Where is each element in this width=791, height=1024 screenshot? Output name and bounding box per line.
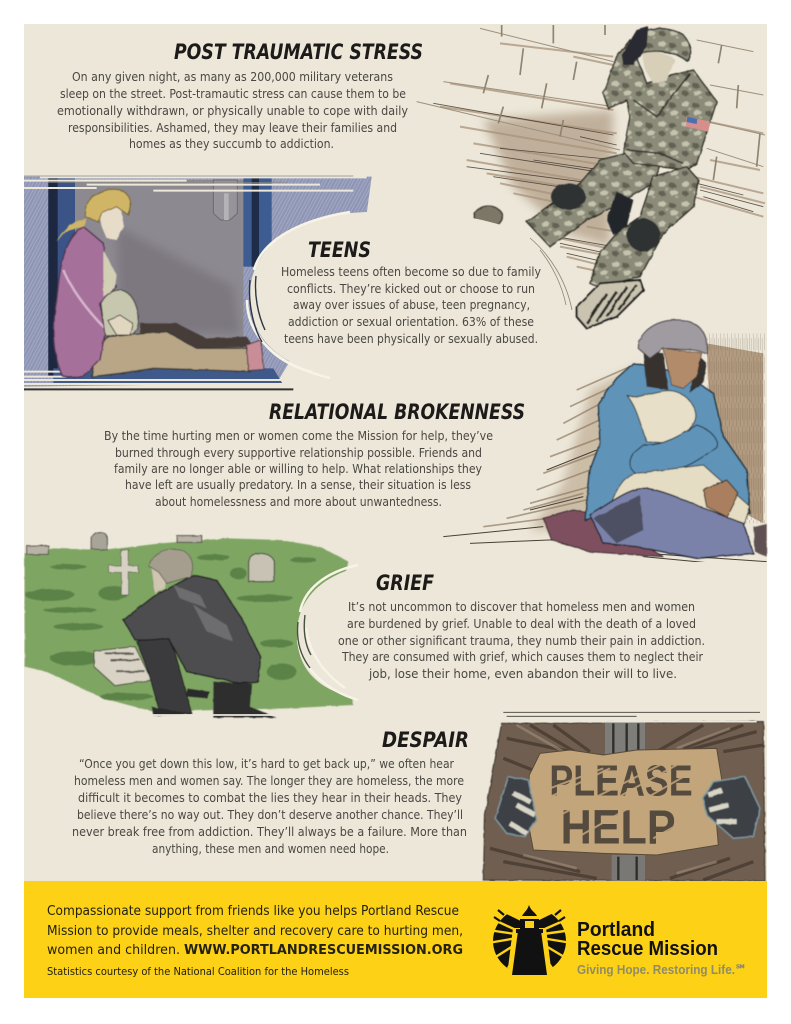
body text: relational brokenness: have left are usually predatory. In a sense, their situation is less — [125, 477, 471, 492]
heading: despair: DESPAIR — [382, 728, 469, 752]
body text: teens: conflicts. They’re kicked out or choose to run — [287, 281, 535, 296]
footer message: Mission to provide meals, shelter and recovery care to hurting men, — [47, 924, 463, 939]
body text: post traumatic stress: responsibilities. Ashamed, they may leave their families and — [68, 120, 397, 135]
body text: despair: “Once you get down this low, it’s hard to get back up,” we often hear — [79, 756, 455, 771]
body text: post traumatic stress: emotionally withdrawn, or physically unable to cope with daily — [57, 103, 408, 118]
please help sign lettering — [549, 757, 693, 854]
body text: relational brokenness: By the time hurting men or women come the Mission for help, they’ve — [104, 428, 493, 443]
icon: lighthouse logo — [488, 905, 572, 976]
body text: post traumatic stress — [57, 69, 408, 151]
section: teens — [281, 238, 541, 346]
body text: despair: never break free from addiction. They’ll always be a failure. More than — [72, 824, 467, 839]
logo wordmark: Rescue Mission — [577, 937, 718, 960]
heading: relational brokenness: RELATIONAL BROKENNESS — [269, 400, 525, 424]
body text: relational brokenness: about homelessness and more about unwantedness. — [155, 494, 442, 509]
heading: teens: TEENS — [308, 238, 371, 262]
heading: post traumatic stress: POST TRAUMATIC STRESS — [174, 40, 423, 64]
body text: grief: are burdened by grief. Unable to deal with the death of a loved — [347, 616, 696, 631]
yellow footer band — [24, 881, 767, 998]
body text: despair: difficult it becomes to combat the lies they hear in their heads. They — [78, 790, 462, 805]
illustration: hands holding a please help sign — [483, 712, 765, 881]
cream background panel — [24, 24, 767, 882]
footer message: WWW.PORTLANDRESCUEMISSION.ORG — [184, 943, 463, 958]
section: despair — [72, 728, 469, 856]
statistics credit: Statistics courtesy of the National Coalition for the Homeless — [47, 966, 349, 978]
text bubble: grief — [297, 562, 767, 700]
footer message — [47, 904, 463, 958]
body text: teens: teens have been physically or sexually abused. — [284, 331, 538, 346]
body text: post traumatic stress: On any given night, as many as 200,000 military veterans — [72, 69, 393, 84]
body text: grief — [338, 599, 705, 681]
woman figure — [54, 189, 264, 377]
footer message: women and children. — [47, 943, 180, 958]
body text: relational brokenness — [104, 428, 493, 509]
body text: post traumatic stress: sleep on the street. Post-tramautic stress can cause them to be — [60, 86, 406, 101]
please help sign lettering: HELP — [561, 800, 676, 854]
body text: teens: away over issues of abuse, teen pregnancy, — [293, 297, 530, 312]
body text: grief: one or other significant trauma, they numb their pain in addiction. — [338, 633, 705, 648]
illustration: man grieving at a grave — [25, 532, 353, 720]
woman figure — [543, 320, 767, 558]
text bubble: teens — [247, 211, 572, 383]
body text: despair: believe there’s no way out. They don’t deserve another chance. They’ll — [77, 807, 463, 822]
illustration: woman hugging a dog — [443, 320, 767, 568]
body text: post traumatic stress: homes as they succumb to addiction. — [129, 136, 334, 151]
section: grief — [338, 571, 705, 681]
soldier figure — [474, 27, 717, 328]
body text: grief: They are consumed with grief, which causes them to neglect their — [341, 649, 704, 664]
please help sign lettering: PLEASE — [549, 757, 693, 806]
body text: grief: job, lose their home, even abandon their will to live. — [368, 666, 677, 681]
illustration: pregnant teen in doorway — [24, 173, 377, 393]
illustration: soldier against brick wall — [417, 25, 765, 328]
body text: grief: It’s not uncommon to discover that homeless men and women — [348, 599, 695, 614]
body text: despair: anything, these men and women need hope. — [152, 841, 389, 856]
body text: despair: homeless men and women say. The longer they are homeless, the more — [74, 773, 464, 788]
section: post traumatic stress — [57, 40, 423, 151]
section: relational brokenness — [104, 400, 525, 509]
footer message: Compassionate support from friends like you helps Portland Rescue — [47, 904, 459, 919]
body text: teens: Homeless teens often become so due to family — [281, 264, 541, 279]
body text: teens: addiction or sexual orientation. 63% of these — [288, 314, 534, 329]
body text: despair — [72, 756, 467, 856]
body text: relational brokenness: burned through every supportive relationship possible. Friends and — [115, 445, 482, 460]
body text: teens — [281, 264, 541, 346]
logo wordmark: Portland — [577, 918, 655, 941]
logo wordmark: Giving Hope. Restoring Life.℠ — [577, 962, 747, 977]
logo wordmark — [577, 918, 747, 977]
body text: relational brokenness: family are no longer able or willing to help. What relationships they — [114, 461, 482, 476]
heading: grief: GRIEF — [376, 571, 435, 595]
